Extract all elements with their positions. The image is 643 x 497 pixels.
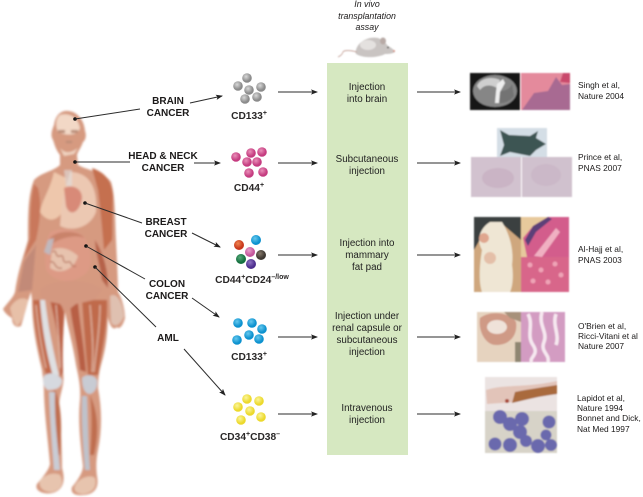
marker label: CD44 CD24: CD44 (215, 275, 241, 286)
marker label: CD34 CD38: CD34 (220, 432, 246, 443)
leader line: head and neck cancer (73, 160, 130, 164)
assay text: subcutaneous: Subcutaneous (336, 154, 398, 165)
bones (40, 300, 59, 376)
arrow: cells to assay row 4 (278, 336, 317, 338)
arrow: assay to result row 3 (417, 254, 460, 256)
image: breast xenograft mouse and histology (474, 217, 569, 292)
image: brain MRI and histology (470, 73, 570, 110)
citation: Prince: Prince et al, (578, 152, 622, 162)
cells: CD133 blue (232, 318, 267, 345)
muscles (92, 168, 113, 250)
arrow: head and neck label to cells (194, 162, 220, 164)
arrow: breast label to cells (192, 233, 220, 247)
heading: in vivo transplantation assay: transplantation (338, 11, 396, 21)
arrow: cells to assay row 2 (278, 162, 317, 164)
citation: Singh: Singh et al, (578, 80, 620, 90)
heading: in vivo transplantation assay: assay (356, 22, 379, 32)
assay text: subcutaneous: injection (349, 166, 385, 177)
leader line: brain cancer (73, 109, 140, 121)
arrow: AML label to cells (184, 349, 225, 395)
leader line: AML (93, 265, 156, 327)
arrow: brain label to cells (190, 96, 222, 103)
marker label: CD34 CD38: – (276, 431, 280, 438)
label: breast cancer: BREAST (145, 217, 187, 228)
image: mouse photo and histology (471, 128, 572, 197)
figure: human anatomy body (3, 111, 125, 495)
label: colon cancer: COLON (149, 279, 185, 290)
arrow: assay to result row 5 (417, 413, 460, 415)
marker label: CD44 CD24: + (241, 274, 245, 281)
assay text: renal capsule: Injection under (335, 311, 400, 322)
arrow: assay to result row 2 (417, 162, 460, 164)
assay text: intravenous: Intravenous (341, 403, 393, 414)
label: head and neck cancer: CANCER (142, 163, 185, 174)
leader line: colon cancer (84, 244, 145, 279)
assay text: mammary fat pad: Injection into (339, 238, 395, 249)
marker label: CD44 CD24: CD24 (245, 275, 272, 286)
cells: CD133 grey (233, 73, 266, 104)
image: colon xenograft and histology (477, 312, 565, 362)
label: brain cancer: BRAIN (152, 96, 184, 107)
cells: CD44 magenta (231, 147, 268, 178)
assay text: brain: into brain (347, 94, 387, 105)
image: AML tissue and blood smear (485, 377, 557, 453)
label: brain cancer: CANCER (147, 108, 190, 119)
citation: Singh: Nature 2004 (578, 91, 624, 101)
assay text: intravenous: injection (349, 415, 385, 426)
label: breast cancer: CANCER (145, 229, 188, 240)
arrow: cells to assay row 3 (278, 254, 317, 256)
marker label: CD34 CD38: CD38 (250, 432, 276, 443)
citation: O'Brien and Ricci-Vitani: Nature 2007 (578, 341, 624, 351)
assay text: renal capsule: renal capsule or (332, 323, 403, 334)
assay text: renal capsule: subcutaneous (336, 335, 398, 346)
icon: mouse (338, 38, 395, 57)
marker label: CD133: + (263, 110, 267, 117)
citation: Lapidot and Bonnet: Nat Med 1997 (577, 424, 630, 434)
citation: Lapidot and Bonnet: Bonnet and Dick, (577, 413, 641, 423)
assay text: renal capsule: injection (349, 347, 385, 358)
citation: Lapidot and Bonnet: Lapidot et al, (577, 393, 625, 403)
cells: CD34 yellow (233, 394, 266, 425)
marker label: CD44: + (260, 182, 264, 189)
arrow: assay to result row 4 (417, 336, 460, 338)
marker label: CD133: CD133 (231, 352, 263, 363)
label: head and neck cancer: HEAD & NECK (128, 151, 198, 162)
arrow: assay to result row 1 (417, 91, 460, 93)
assay text: mammary fat pad: fat pad (352, 262, 382, 273)
citation: O'Brien and Ricci-Vitani: Ricci-Vitani et al (578, 331, 638, 341)
citation: Al-Hajj: Al-Hajj et al, (578, 244, 623, 254)
assay text: brain: Injection (349, 82, 385, 93)
label: AML: AML (157, 333, 179, 344)
arrow: cells to assay row 5 (278, 413, 317, 415)
citation: O'Brien and Ricci-Vitani: O'Brien et al, (578, 321, 626, 331)
citation: Al-Hajj: PNAS 2003 (578, 255, 622, 265)
arrow: colon label to cells (192, 298, 219, 317)
assay text: mammary fat pad: mammary (345, 250, 389, 261)
marker label: CD44: CD44 (234, 183, 260, 194)
label: colon cancer: CANCER (146, 291, 189, 302)
panel: assay column (327, 63, 408, 455)
cells: breast multicolour (234, 235, 266, 269)
marker label: CD34 CD38: + (246, 431, 250, 438)
marker label: CD133: + (263, 351, 267, 358)
marker label: CD133: CD133 (231, 111, 263, 122)
arrow: cells to assay row 1 (278, 91, 317, 93)
leader line: breast cancer (83, 201, 142, 223)
marker label: CD44 CD24: –/low (271, 274, 289, 281)
citation: Lapidot and Bonnet: Nature 1994 (577, 403, 623, 413)
chest and organs detail (40, 172, 66, 220)
citation: Prince: PNAS 2007 (578, 163, 622, 173)
